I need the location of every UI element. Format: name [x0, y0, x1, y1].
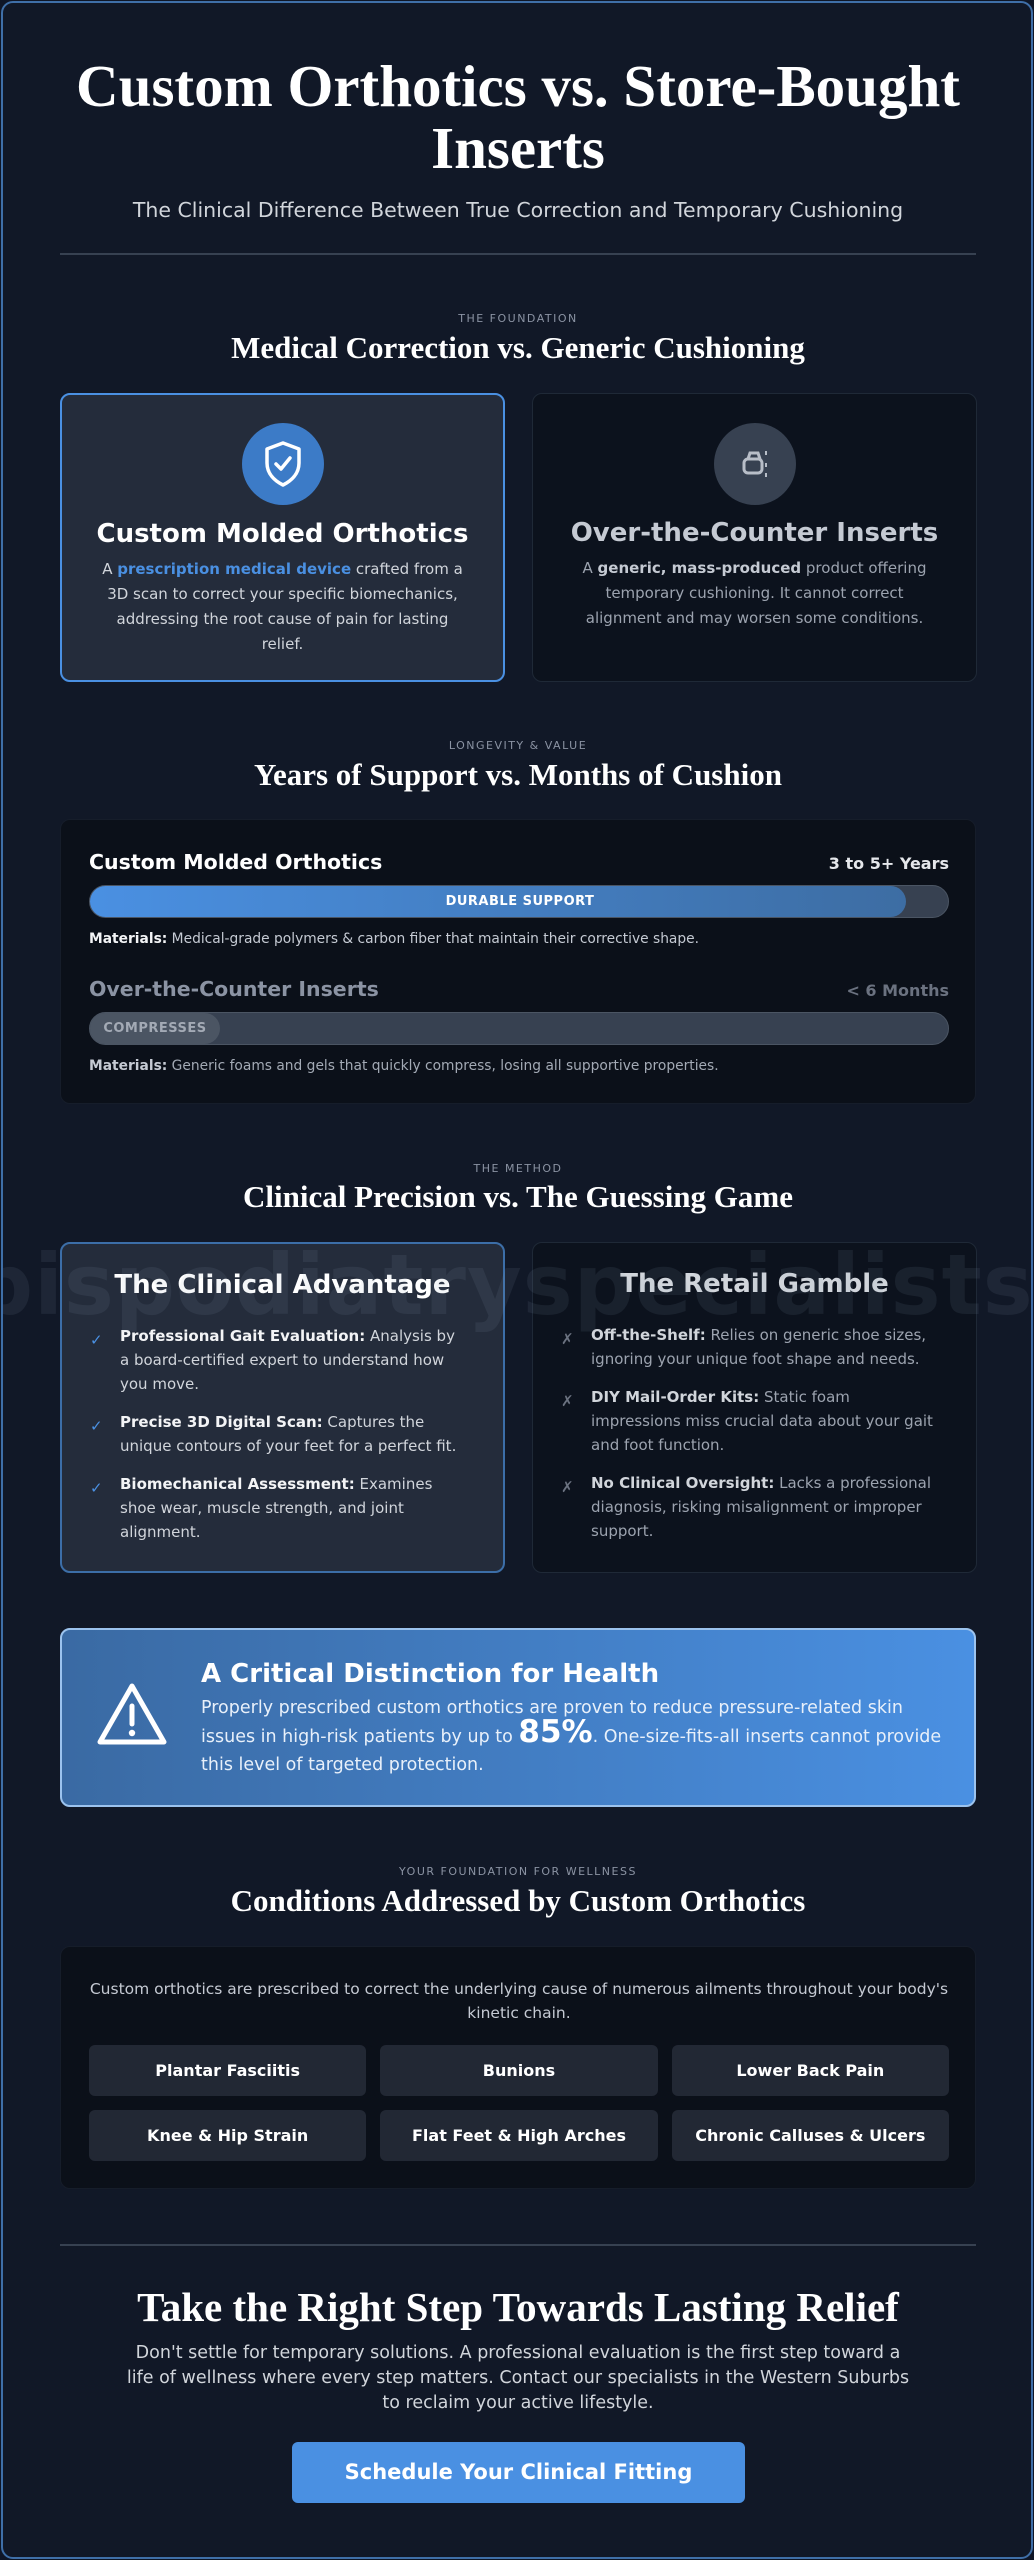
- chips grid: Bunions: [483, 2061, 555, 2080]
- bar: custom: DURABLE SUPPORT: [446, 894, 594, 909]
- heading: clinical precision: Clinical Precision vs. The Guessing Game: [243, 1179, 793, 1214]
- bar: OTC: Over-the-Counter Inserts: [89, 977, 379, 1001]
- button: schedule: Schedule Your Clinical Fitting: [345, 2460, 692, 2484]
- panel: clinical advantage: [60, 1242, 505, 1573]
- chips grid: Lower Back Pain: [736, 2061, 884, 2080]
- callout title: A Critical Distinction for Health: [201, 1659, 659, 1689]
- callout: critical distinction: [60, 1628, 976, 1807]
- chips grid: Flat Feet & High Arches: [412, 2126, 626, 2145]
- button: schedule: [292, 2442, 745, 2503]
- panel: conditions: [60, 1946, 976, 2189]
- icon: warning: [98, 1684, 166, 1744]
- bar: custom: Materials: Medical-grade polymers & carbon fiber that maintain their corrective shape.: [89, 931, 699, 947]
- intro text: Custom orthotics are prescribed to correct the underlying cause of numerous ailments throughout your body's kinetic chain.: [90, 1980, 948, 2022]
- icon: shield check: [242, 423, 324, 505]
- card text: A prescription medical device crafted from a 3D scan to correct your specific biomechanics, addressing the root cause of pain for lasting relief.: [102, 560, 463, 653]
- bar: custom: [89, 850, 949, 947]
- list: advantages: Professional Gait Evaluation: Analysis by a board-certified expert to understand how you move.: [120, 1327, 455, 1393]
- panel: custom orthotics card: [60, 393, 505, 682]
- chips grid: [89, 2045, 949, 2161]
- subtitle: The Clinical Difference Between True Correction and Temporary Cushioning: [133, 198, 903, 222]
- section label: the foundation: THE FOUNDATION: [458, 312, 578, 325]
- list: gambles: ✗: [561, 1330, 574, 1348]
- heading: years of support: Years of Support vs. Months of Cushion: [254, 757, 782, 792]
- list: gambles: ✗: [561, 1478, 574, 1496]
- heading: conditions: Conditions Addressed by Custom Orthotics: [231, 1883, 805, 1918]
- heading: medical correction: Medical Correction vs. Generic Cushioning: [231, 330, 805, 365]
- CTA text: Don't settle for temporary solutions. A professional evaluation is the first step toward a life of wellness where every step matters. Contact our specialists in the Western Suburbs to reclaim your active lifestyle.: [127, 2343, 909, 2413]
- list: gambles: [561, 1326, 933, 1540]
- CTA heading: Take the Right Step Towards Lasting Relief: [137, 2284, 899, 2330]
- chips grid: Knee & Hip Strain: [147, 2126, 308, 2145]
- bar: OTC: COMPRESSES: [103, 1021, 207, 1036]
- list: advantages: ✓: [90, 1331, 103, 1349]
- chips grid: Chronic Calluses & Ulcers: [695, 2126, 925, 2145]
- list: advantages: ✓: [90, 1417, 103, 1435]
- card text: A generic, mass-produced product offering temporary cushioning. It cannot correct alignment and may worsen some conditions.: [582, 559, 926, 627]
- icon: insert: [714, 423, 796, 505]
- card title: Over-the-Counter Inserts: [571, 518, 938, 548]
- bar: OTC: < 6 Months: [846, 981, 949, 1000]
- title: Custom Orthotics vs. Store-Bought Inserts: [76, 53, 960, 181]
- bar: custom: Custom Molded Orthotics: [89, 850, 382, 874]
- bar: custom: 3 to 5+ Years: [829, 854, 949, 873]
- section label: the method: THE METHOD: [474, 1162, 562, 1175]
- callout text: Properly prescribed custom orthotics are proven to reduce pressure-related skin issues in high-risk patients by up to 85%. One-size-fits-all inserts cannot provide this level of targeted protection.: [201, 1698, 941, 1775]
- list: advantages: ✓: [90, 1479, 103, 1497]
- card title: The Retail Gamble: [620, 1269, 889, 1299]
- list: advantages: [90, 1327, 456, 1541]
- list: advantages: Precise 3D Digital Scan: Captures the unique contours of your feet for a perfect fit.: [120, 1413, 456, 1455]
- bar: OTC: Materials: Generic foams and gels that quickly compress, losing all supportive properties.: [89, 1058, 719, 1074]
- section label: longevity: LONGEVITY & VALUE: [449, 739, 587, 752]
- card title: Custom Molded Orthotics: [96, 519, 468, 549]
- list: advantages: Biomechanical Assessment: Examines shoe wear, muscle strength, and joint alignment.: [120, 1475, 432, 1541]
- panel: retail gamble: [532, 1242, 977, 1573]
- list: gambles: Off-the-Shelf: Relies on generic shoe sizes, ignoring your unique foot shape and needs.: [591, 1326, 926, 1368]
- panel: OTC card: [532, 393, 977, 682]
- chips grid: Plantar Fasciitis: [155, 2061, 300, 2080]
- card title: The Clinical Advantage: [114, 1270, 451, 1300]
- list: gambles: No Clinical Oversight: Lacks a professional diagnosis, risking misalignment or improper support.: [591, 1474, 931, 1540]
- list: gambles: DIY Mail-Order Kits: Static foam impressions miss crucial data about your gait and foot function.: [591, 1388, 933, 1454]
- section label: wellness: YOUR FOUNDATION FOR WELLNESS: [399, 1865, 637, 1878]
- list: gambles: ✗: [561, 1392, 574, 1410]
- bar: OTC: [89, 977, 949, 1074]
- panel: longevity bars: [60, 819, 976, 1104]
